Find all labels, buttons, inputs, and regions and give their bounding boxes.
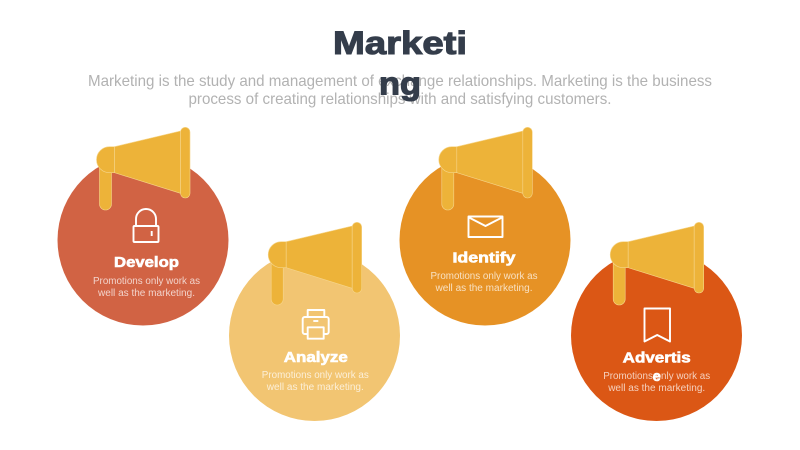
text: develop description — [93, 276, 200, 299]
title — [333, 25, 467, 102]
heading: advertise: Advertis — [623, 350, 691, 366]
subtitle: process of creating relationships with and satisfying customers. — [188, 91, 612, 108]
panel: identify — [400, 127, 570, 326]
icon: megaphone — [268, 222, 362, 305]
icon: megaphone — [97, 127, 190, 210]
text: advertise description: well as the marketing. — [607, 383, 705, 394]
text: develop description: well as the marketing. — [97, 288, 195, 299]
icon: megaphone — [610, 222, 704, 305]
text: identify description: well as the marketing. — [434, 283, 532, 294]
panel: develop — [58, 127, 228, 326]
subtitle: Marketing is the study and management of exchange relationships. Marketing is the business — [88, 73, 712, 90]
heading: analyze: Analyze — [284, 350, 348, 366]
icon: printer — [303, 310, 329, 339]
text: develop description: Promotions only work as — [93, 276, 200, 287]
text: advertise description: Promotions only work as — [603, 371, 710, 382]
text: analyze description: well as the marketing. — [266, 382, 364, 393]
heading: develop: Develop — [114, 255, 179, 271]
icon: lock — [134, 209, 158, 242]
text: identify description: Promotions only work as — [430, 271, 538, 282]
icon: bookmark — [644, 308, 670, 342]
heading: identify: Identify — [452, 250, 516, 266]
subtitle — [88, 73, 712, 108]
panel: advertise — [571, 222, 742, 421]
heading: advertise — [623, 350, 691, 385]
icon: megaphone — [439, 127, 532, 210]
text: advertise description — [603, 371, 710, 394]
text: analyze description — [262, 370, 369, 393]
title: Marketi — [333, 25, 467, 61]
heading: advertise: e — [653, 369, 661, 385]
text: identify description — [430, 271, 538, 294]
panel: analyze — [229, 222, 400, 421]
text: analyze description: Promotions only work as — [262, 370, 369, 381]
icon: envelope — [468, 216, 502, 237]
title: ng — [379, 66, 421, 102]
